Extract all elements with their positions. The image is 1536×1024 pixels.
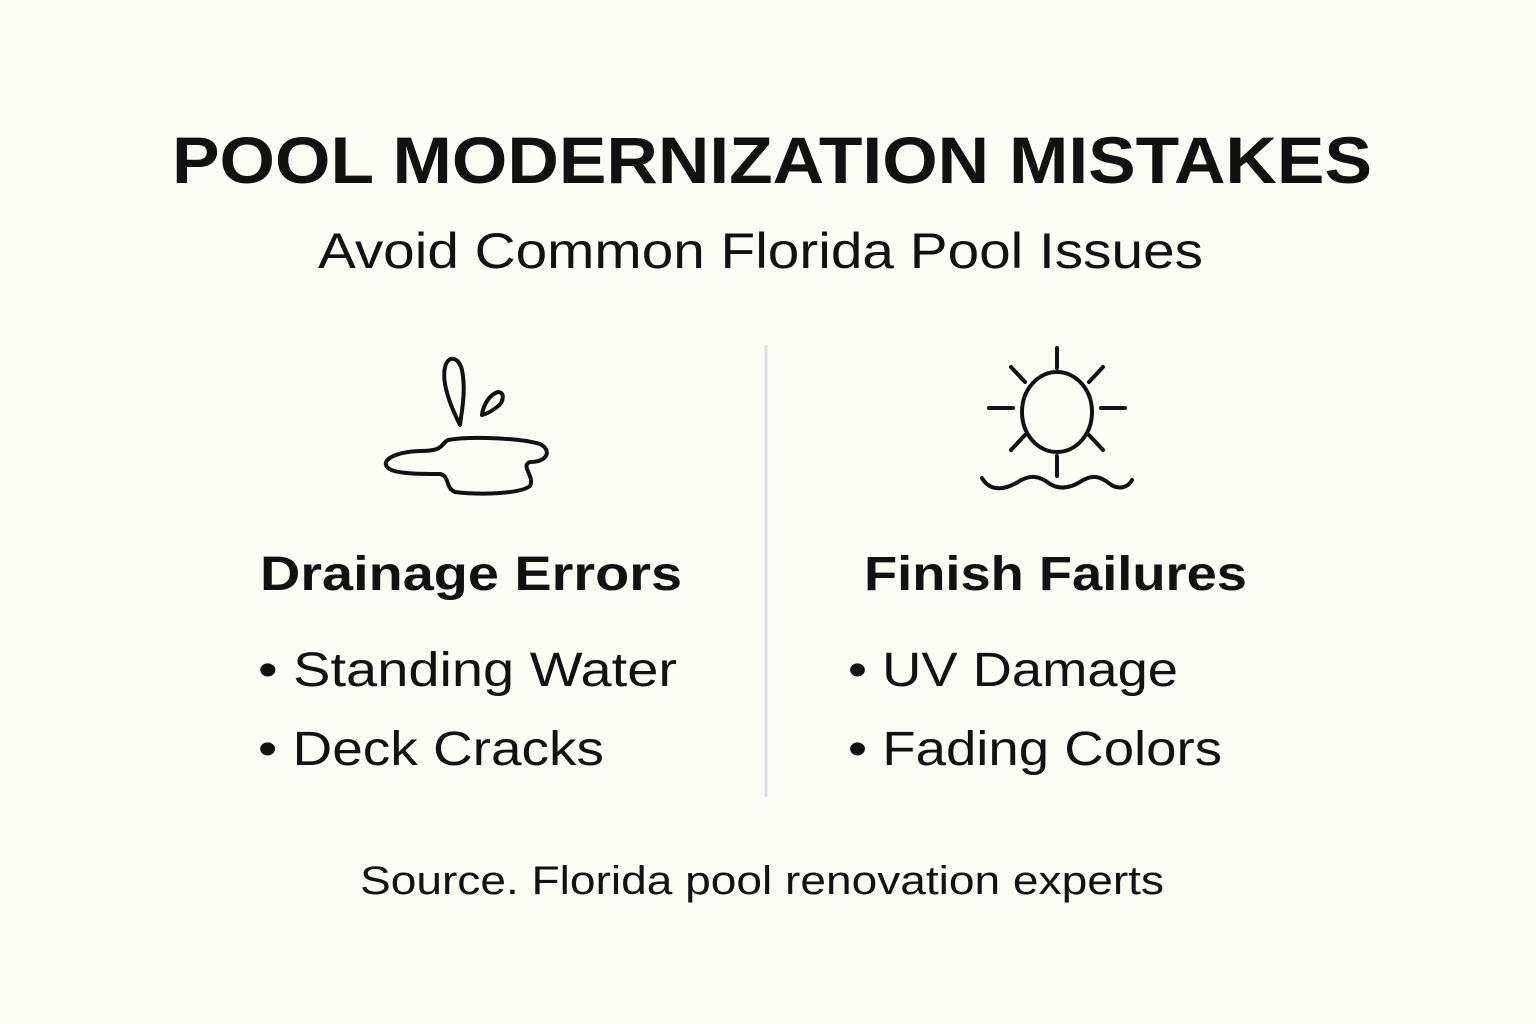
bullet list: • UV Damage bbox=[848, 644, 1178, 697]
bullet list: • Standing Water bbox=[258, 644, 677, 697]
bullet list bbox=[258, 644, 677, 776]
bullet list bbox=[848, 644, 1222, 776]
title: POOL MODERNIZATION MISTAKES bbox=[172, 123, 1372, 197]
bullet list: • Deck Cracks bbox=[258, 723, 604, 776]
source note: Source. Florida pool renovation experts bbox=[360, 859, 1164, 903]
panel: drainage errors bbox=[258, 359, 682, 776]
icon: water drops and puddle bbox=[386, 359, 547, 494]
heading: Finish Failures: Finish Failures bbox=[864, 548, 1247, 601]
subtitle: Avoid Common Florida Pool Issues bbox=[318, 223, 1203, 279]
heading: Drainage Errors: Drainage Errors bbox=[260, 548, 682, 601]
panel: finish failures bbox=[848, 348, 1247, 776]
bullet list: • Fading Colors bbox=[848, 723, 1222, 776]
icon: sun over water bbox=[982, 348, 1132, 488]
